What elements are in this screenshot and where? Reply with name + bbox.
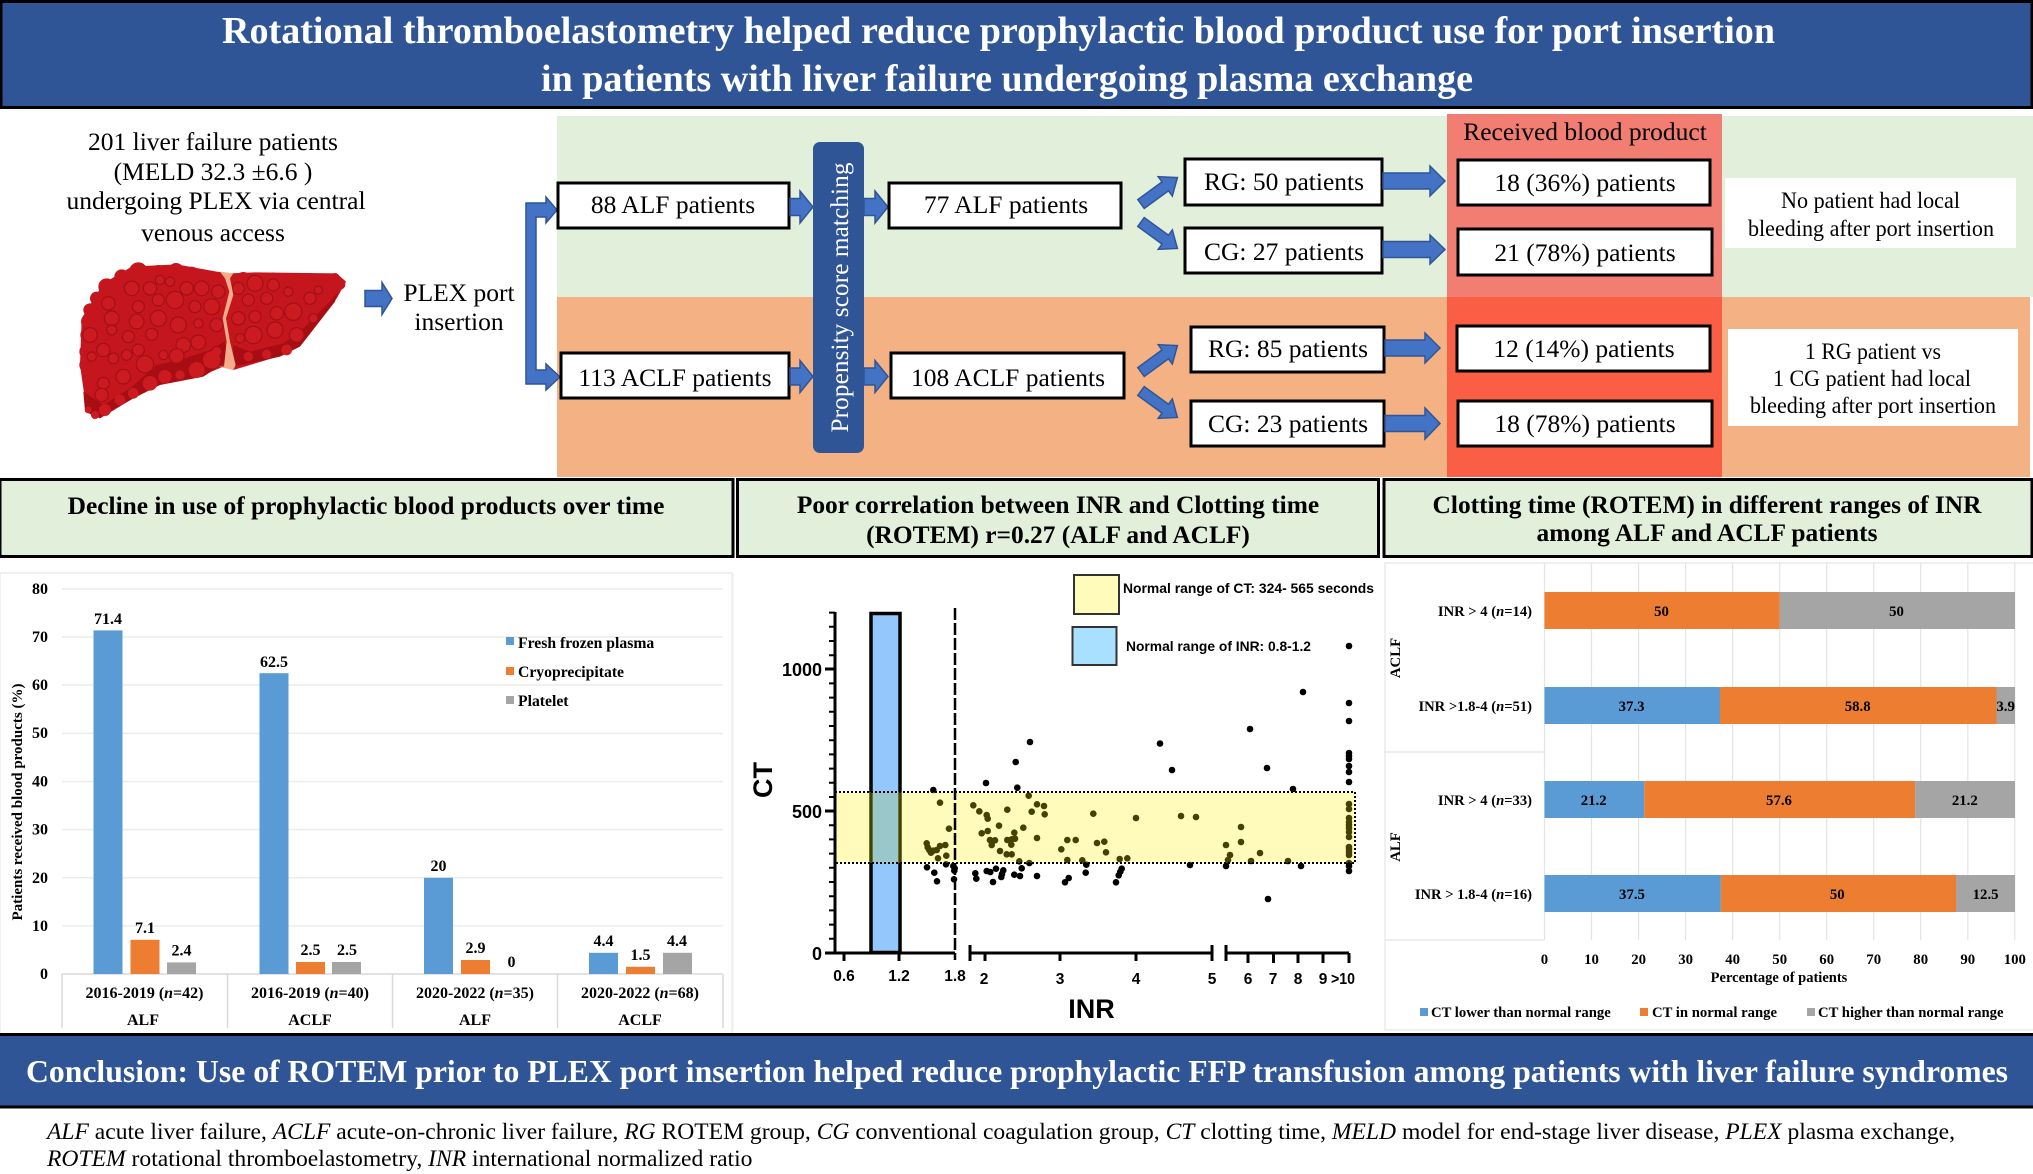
scatter points xyxy=(923,643,1352,902)
bar: ACLF INR 1.8 to 4 xyxy=(1418,687,2015,724)
text: cohort description: undergoing PLEX via central xyxy=(66,186,366,215)
bar value labels: 2.5 xyxy=(300,942,320,959)
y axis labels: 0 xyxy=(40,966,48,983)
box: 12 (14%) patients xyxy=(1457,326,1710,371)
x tick labels: 80 xyxy=(1913,952,1928,968)
box: CG 23 patients: CG: 23 patients xyxy=(1208,409,1368,438)
arrow: ACLF to RG xyxy=(1134,336,1184,382)
x tick labels: 30 xyxy=(1678,952,1693,968)
text: PLEX port insertion xyxy=(403,278,515,336)
abbreviations footnote xyxy=(45,1119,1955,1172)
category labels: ACLF xyxy=(288,1012,332,1029)
bar: ACLF INR 1.8 to 4: INR >1.8-4 (n=51) xyxy=(1418,699,1532,715)
x tick labels: 4 xyxy=(1132,971,1141,988)
bar: ALF INR 1.8 to 4: 12.5 xyxy=(1973,887,1999,903)
x tick labels: 2 xyxy=(980,971,988,988)
x tick labels: 20 xyxy=(1631,952,1646,968)
x tick labels: 90 xyxy=(1960,952,1975,968)
y tick labels: 500 xyxy=(792,802,822,822)
bar value labels xyxy=(94,611,687,971)
arrow: split bracket to ALF and ACLF xyxy=(526,197,560,390)
text: cohort description: 201 liver failure patients xyxy=(88,127,338,156)
box: 18 (78%) patients xyxy=(1458,401,1712,446)
box: 18 (78%) patients: 18 (78%) patients xyxy=(1494,409,1676,438)
x tick labels: 7 xyxy=(1269,971,1277,988)
group label: ALF: ALF xyxy=(1388,832,1404,862)
heading: clotting time by INR range: among ALF and ACLF patients xyxy=(1537,519,1878,547)
stacked bar chart: clotting time by INR range xyxy=(1385,563,2033,1030)
arrow: liver to PLEX port xyxy=(365,282,392,314)
normal CT range band xyxy=(835,792,1355,863)
y axis labels: 20 xyxy=(32,870,48,887)
bar value labels: 7.1 xyxy=(135,920,155,937)
bar: ACLF INR above 4 xyxy=(1438,592,2015,629)
box: RG 85 patients xyxy=(1191,327,1384,372)
box: CG 23 patients xyxy=(1191,401,1384,446)
heading: INR and clotting time correlation: Poor correlation between INR and Clotting time xyxy=(797,491,1319,519)
arrow: ALF to CG xyxy=(1134,212,1184,258)
y tick labels xyxy=(782,660,822,964)
arrow: matching to 108 ACLF xyxy=(864,360,888,392)
abbreviations footnote: ROTEM rotational thromboelastometry, INR international normalized ratio xyxy=(46,1146,752,1172)
conclusion banner: Conclusion: Use of ROTEM prior to PLEX port insertion helped reduce prophylactic FFP transfusion among patients with liver failure syndromes xyxy=(26,1053,2008,1089)
box: RG 50 patients xyxy=(1185,159,1382,205)
y axis labels: 10 xyxy=(32,918,48,935)
INR 1.8 dashed threshold xyxy=(954,608,956,960)
x tick labels: 40 xyxy=(1725,952,1740,968)
arrow: RG 50 to result xyxy=(1383,166,1445,196)
panel: received blood product column: Received blood product xyxy=(1463,117,1707,146)
bar: ACLF INR 1.8 to 4: 37.3 xyxy=(1619,699,1645,715)
category labels: ALF xyxy=(459,1012,491,1029)
y axis labels: 30 xyxy=(32,822,48,838)
bar: ALF INR 1.8 to 4: INR > 1.8-4 (n=16) xyxy=(1415,887,1532,903)
block: propensity score matching: Propensity score matching xyxy=(826,162,854,432)
arrow: matching to 77 ALF xyxy=(864,191,888,223)
bar value labels: 71.4 xyxy=(94,611,122,628)
legend xyxy=(506,635,654,710)
box: CG 27 patients xyxy=(1185,228,1382,273)
heading: decline in blood products xyxy=(0,480,733,556)
box: 113 ACLF patients: 113 ACLF patients xyxy=(578,363,772,392)
bar: ACLF INR above 4: 50 xyxy=(1889,604,1904,620)
panel: ACLF flow background xyxy=(557,297,2030,477)
x tick labels: 3 xyxy=(1056,971,1065,988)
scatter plot: INR vs clotting time xyxy=(733,573,1374,1030)
bar value labels: 2.4 xyxy=(172,942,192,960)
legend xyxy=(1420,1005,2004,1021)
bar value labels: 0 xyxy=(508,954,516,971)
legend: normal CT range xyxy=(1074,575,1374,614)
legend: CT lower than normal range xyxy=(1431,1005,1611,1021)
callout: ACLF bleeding outcome: 1 RG patient vs xyxy=(1805,339,1941,365)
y tick labels: 1000 xyxy=(782,660,822,680)
text: PLEX port insertion: insertion xyxy=(414,307,504,336)
title banner: Rotational thromboelastometry helped reduce prophylactic blood product use for port insertion xyxy=(222,10,1775,52)
box: 88 ALF patients xyxy=(558,183,789,228)
x tick labels: 10 xyxy=(1584,952,1599,968)
callout: ACLF bleeding outcome xyxy=(1728,329,2018,426)
callout: ACLF bleeding outcome: bleeding after port insertion xyxy=(1750,393,1996,419)
panel: ALF flow background xyxy=(557,116,2033,297)
x tick labels: 50 xyxy=(1772,952,1787,968)
block: propensity score matching xyxy=(813,142,864,453)
callout: ALF bleeding outcome xyxy=(1725,178,2016,248)
y axis labels xyxy=(32,581,48,983)
abbreviations footnote: ALF acute liver failure, ACLF acute-on-chronic liver failure, RG ROTEM group, CG conventional coagulation group, CT clotting time, MELD model for end-stage liver disease, PLEX plasma exchange, xyxy=(45,1119,1955,1145)
x tick labels: 0.6 xyxy=(833,968,855,985)
bar value labels: 2.5 xyxy=(337,942,357,959)
box: RG 50 patients: RG: 50 patients xyxy=(1204,167,1364,196)
x tick labels: 8 xyxy=(1294,971,1303,988)
x tick labels: 100 xyxy=(2004,952,2026,968)
bar value labels: 2.9 xyxy=(466,940,486,957)
x tick labels xyxy=(1541,952,2026,968)
bar value labels: 1.5 xyxy=(630,947,650,964)
box: 12 (14%) patients: 12 (14%) patients xyxy=(1493,334,1675,363)
title banner xyxy=(1,2,2032,108)
y axis labels: 70 xyxy=(32,629,48,646)
conclusion banner xyxy=(0,1034,2033,1107)
x axis title: INR xyxy=(1068,994,1115,1024)
x tick labels: 5 xyxy=(1208,971,1217,988)
y axis labels: 50 xyxy=(32,725,48,742)
x axis xyxy=(825,945,1349,963)
bar: ALF INR above 4: 21.2 xyxy=(1952,793,1978,809)
arrow: ACLF to matching xyxy=(790,360,813,392)
bar: ALF INR 1.8 to 4: 50 xyxy=(1830,887,1845,903)
x tick labels: 70 xyxy=(1866,952,1881,968)
bar value labels: 20 xyxy=(430,858,446,875)
box: 21 (78%) patients xyxy=(1458,229,1712,275)
bar value labels: 62.5 xyxy=(260,654,288,671)
box: CG 27 patients: CG: 27 patients xyxy=(1204,237,1364,266)
callout: ACLF bleeding outcome: 1 CG patient had local xyxy=(1773,366,1971,392)
text: cohort description: (MELD 32.3 ±6.6 ) xyxy=(114,157,312,186)
bar: ACLF INR above 4: 50 xyxy=(1654,604,1669,620)
bar: ACLF INR above 4: INR > 4 (n=14) xyxy=(1438,604,1532,620)
bar: ALF INR above 4 xyxy=(1438,781,2015,818)
arrow: CG 27 to result xyxy=(1383,235,1445,264)
group label: ACLF: ACLF xyxy=(1388,638,1404,678)
legend: Platelet xyxy=(518,693,569,710)
bar value labels: 4.4 xyxy=(667,933,687,950)
heading: INR and clotting time correlation: (ROTEM) r=0.27 (ALF and ACLF) xyxy=(866,521,1250,549)
y axis labels: 40 xyxy=(32,774,48,790)
bar value labels: 4.4 xyxy=(594,933,614,950)
category labels xyxy=(85,985,699,1029)
title banner: in patients with liver failure undergoing plasma exchange xyxy=(541,58,1473,100)
y axis title: CT xyxy=(748,762,778,798)
legend: normal CT range: Normal range of CT: 324- 565 seconds xyxy=(1123,580,1374,596)
bar: ACLF INR 1.8 to 4: 58.8 xyxy=(1845,699,1871,715)
category labels: ALF xyxy=(127,1012,159,1029)
category labels: 2020-2022 (n=68) xyxy=(581,985,699,1002)
category labels: ACLF xyxy=(618,1012,662,1029)
platelet bars xyxy=(167,953,692,974)
callout: ALF bleeding outcome: No patient had local xyxy=(1781,188,1960,214)
category labels: 2016-2019 (n=40) xyxy=(251,985,369,1002)
x axis title: Percentage of patients xyxy=(1711,970,1848,986)
box: 77 ALF patients xyxy=(889,183,1121,228)
panel: received blood product column xyxy=(1447,114,1722,477)
arrow: ACLF to CG xyxy=(1134,381,1184,427)
bar: ACLF INR 1.8 to 4: 3.9 xyxy=(1996,699,2015,715)
x tick labels: 0 xyxy=(1541,952,1548,968)
bar: ALF INR 1.8 to 4 xyxy=(1415,875,2015,912)
arrow: ALF to RG xyxy=(1134,168,1184,214)
box: RG 85 patients: RG: 85 patients xyxy=(1208,334,1368,363)
heading: clotting time by INR range xyxy=(1384,480,2032,556)
arrow: CG 23 to result xyxy=(1385,408,1440,439)
cryoprecipitate bars xyxy=(130,940,655,974)
box: 18 (36%) patients xyxy=(1458,160,1710,205)
bar: ALF INR 1.8 to 4: 37.5 xyxy=(1619,887,1645,903)
box: 113 ACLF patients xyxy=(561,353,789,398)
box: 108 ACLF patients xyxy=(891,353,1124,398)
legend: normal INR range: Normal range of INR: 0.8-1.2 xyxy=(1126,638,1311,654)
bar: ALF INR above 4: 21.2 xyxy=(1581,793,1607,809)
fresh frozen plasma bars xyxy=(94,630,618,974)
heading: INR and clotting time correlation xyxy=(738,480,1378,556)
x tick labels: 6 xyxy=(1244,971,1253,988)
x tick labels: 1.2 xyxy=(888,968,910,985)
y axis labels: 60 xyxy=(32,677,48,694)
text: PLEX port insertion: PLEX port xyxy=(403,278,515,307)
arrow: ALF to matching xyxy=(790,191,813,223)
legend: CT higher than normal range xyxy=(1818,1005,2004,1021)
normal INR range band xyxy=(871,614,900,952)
x tick labels xyxy=(833,968,1355,988)
x tick labels: 60 xyxy=(1819,952,1834,968)
box: 88 ALF patients: 88 ALF patients xyxy=(591,190,755,219)
arrow: RG 85 to result xyxy=(1385,333,1440,363)
heading: clotting time by INR range: Clotting time (ROTEM) in different ranges of INR xyxy=(1433,491,1982,519)
category labels: 2020-2022 (n=35) xyxy=(416,985,534,1002)
text: cohort description xyxy=(66,127,366,247)
x tick labels: 1.8 xyxy=(944,968,966,985)
legend: normal INR range xyxy=(1072,627,1311,665)
callout: ALF bleeding outcome: bleeding after port insertion xyxy=(1748,216,1994,242)
legend: Cryoprecipitate xyxy=(518,664,624,681)
y tick labels: 0 xyxy=(812,944,822,964)
y axis xyxy=(825,612,835,953)
box: 21 (78%) patients: 21 (78%) patients xyxy=(1494,238,1676,267)
x tick labels: 9 xyxy=(1319,971,1328,988)
y axis title: Patients received blood products (%) xyxy=(10,684,26,920)
legend: Fresh frozen plasma xyxy=(518,635,654,652)
box: 77 ALF patients: 77 ALF patients xyxy=(924,190,1088,219)
x tick labels: >10 xyxy=(1331,971,1355,988)
text: cohort description: venous access xyxy=(141,218,285,247)
box: 18 (36%) patients: 18 (36%) patients xyxy=(1494,168,1676,197)
legend: CT in normal range xyxy=(1652,1005,1777,1021)
category labels: 2016-2019 (n=42) xyxy=(85,985,204,1002)
bar chart: blood product use over time xyxy=(0,573,732,1038)
bar: ALF INR above 4: INR > 4 (n=33) xyxy=(1438,793,1532,809)
heading: decline in blood products: Decline in use of prophylactic blood products over time xyxy=(68,492,664,520)
y axis labels: 80 xyxy=(32,581,48,598)
bar: ALF INR above 4: 57.6 xyxy=(1766,793,1792,809)
box: 108 ACLF patients: 108 ACLF patients xyxy=(911,363,1105,392)
icon: liver xyxy=(79,262,346,419)
